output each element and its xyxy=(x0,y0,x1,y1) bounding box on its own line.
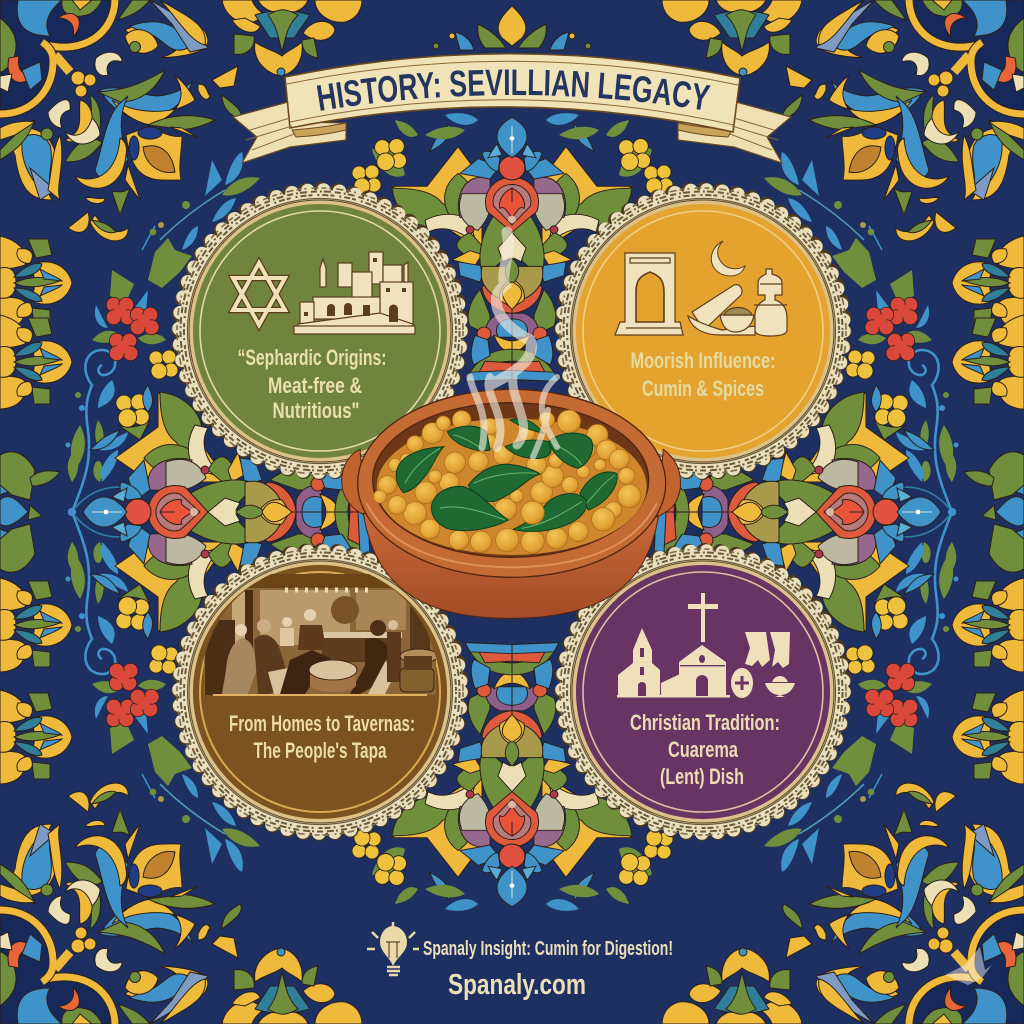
text: Sephardic origins: Meat-free & xyxy=(268,373,362,398)
panel: Moorish influence xyxy=(560,188,846,474)
ribbon band xyxy=(285,54,740,132)
circle fill purple xyxy=(576,565,830,819)
insight text: Spanaly Insight: Cumin for Digestion! xyxy=(423,938,673,960)
bowl body xyxy=(363,513,658,618)
circle fill brown xyxy=(193,565,447,819)
circle fill orange xyxy=(576,204,830,458)
icon: bowl xyxy=(765,676,795,697)
text: homes to taverns: The People's Tapa xyxy=(254,738,387,763)
steam xyxy=(470,232,557,457)
table xyxy=(280,650,330,694)
bowl rim xyxy=(358,389,666,577)
icon: Moorish arch xyxy=(615,253,683,335)
title text: HISTORY: SEVILLIAN LEGACY xyxy=(316,70,711,111)
text: homes to taverns xyxy=(229,711,415,763)
icon: crescent moon xyxy=(711,241,745,276)
text: Christian tradition: (Lent) Dish xyxy=(660,764,744,789)
panel: Sephardic origins xyxy=(177,188,463,474)
icon: hanging cloths xyxy=(745,632,790,668)
text: Moorish influence: Moorish Influence: xyxy=(630,348,776,373)
icon: hill town xyxy=(294,252,415,334)
spinach leaves xyxy=(396,419,617,531)
circle fill olive xyxy=(193,204,447,458)
text: homes to taverns: From Homes to Tavernas: xyxy=(229,711,415,736)
icon: mortar, spices and jar xyxy=(688,269,787,336)
text: Sephardic origins: “Sephardic Origins: xyxy=(238,345,386,370)
panel: homes to taverns xyxy=(177,549,463,835)
site name: Spanaly.com xyxy=(448,969,586,1001)
text: Sephardic origins: Nutritious" xyxy=(272,398,360,423)
text: Christian tradition: Cuarema xyxy=(668,737,739,762)
vines and red flowers xyxy=(66,152,958,872)
title ribbon xyxy=(232,53,792,164)
top finial ornament xyxy=(433,6,591,50)
bottom insight line xyxy=(367,922,673,1001)
watermark star xyxy=(945,947,992,985)
ornament: small leaves and flowers beside top and bottom arms xyxy=(352,113,673,911)
ribbon folds xyxy=(292,123,732,137)
icon: churches xyxy=(617,628,730,698)
sepia tavern scene xyxy=(200,574,440,696)
icon: light bulb xyxy=(367,922,419,975)
side floral borders xyxy=(0,236,1024,784)
icon: star of David xyxy=(233,263,285,325)
chickpeas xyxy=(373,410,641,553)
ribbon left tail xyxy=(233,102,346,163)
stew xyxy=(377,418,647,555)
text: Moorish influence: Cumin & Spices xyxy=(642,376,764,401)
figures xyxy=(222,609,401,694)
text: Moorish influence xyxy=(630,348,776,401)
bowl handles xyxy=(342,449,681,517)
text: Christian tradition xyxy=(630,710,780,789)
icon: medal xyxy=(731,668,753,698)
text: Sephardic origins xyxy=(238,345,386,423)
icon: crucifix xyxy=(688,593,718,642)
ribbon right tail xyxy=(678,102,791,163)
central mandala arms xyxy=(83,117,941,907)
clay bowl of chickpeas and spinach xyxy=(342,389,681,618)
text: Christian tradition: Christian Tradition: xyxy=(630,710,780,735)
barrels xyxy=(400,648,436,662)
panel: Christian tradition xyxy=(560,549,846,835)
leaf veins xyxy=(405,435,615,528)
